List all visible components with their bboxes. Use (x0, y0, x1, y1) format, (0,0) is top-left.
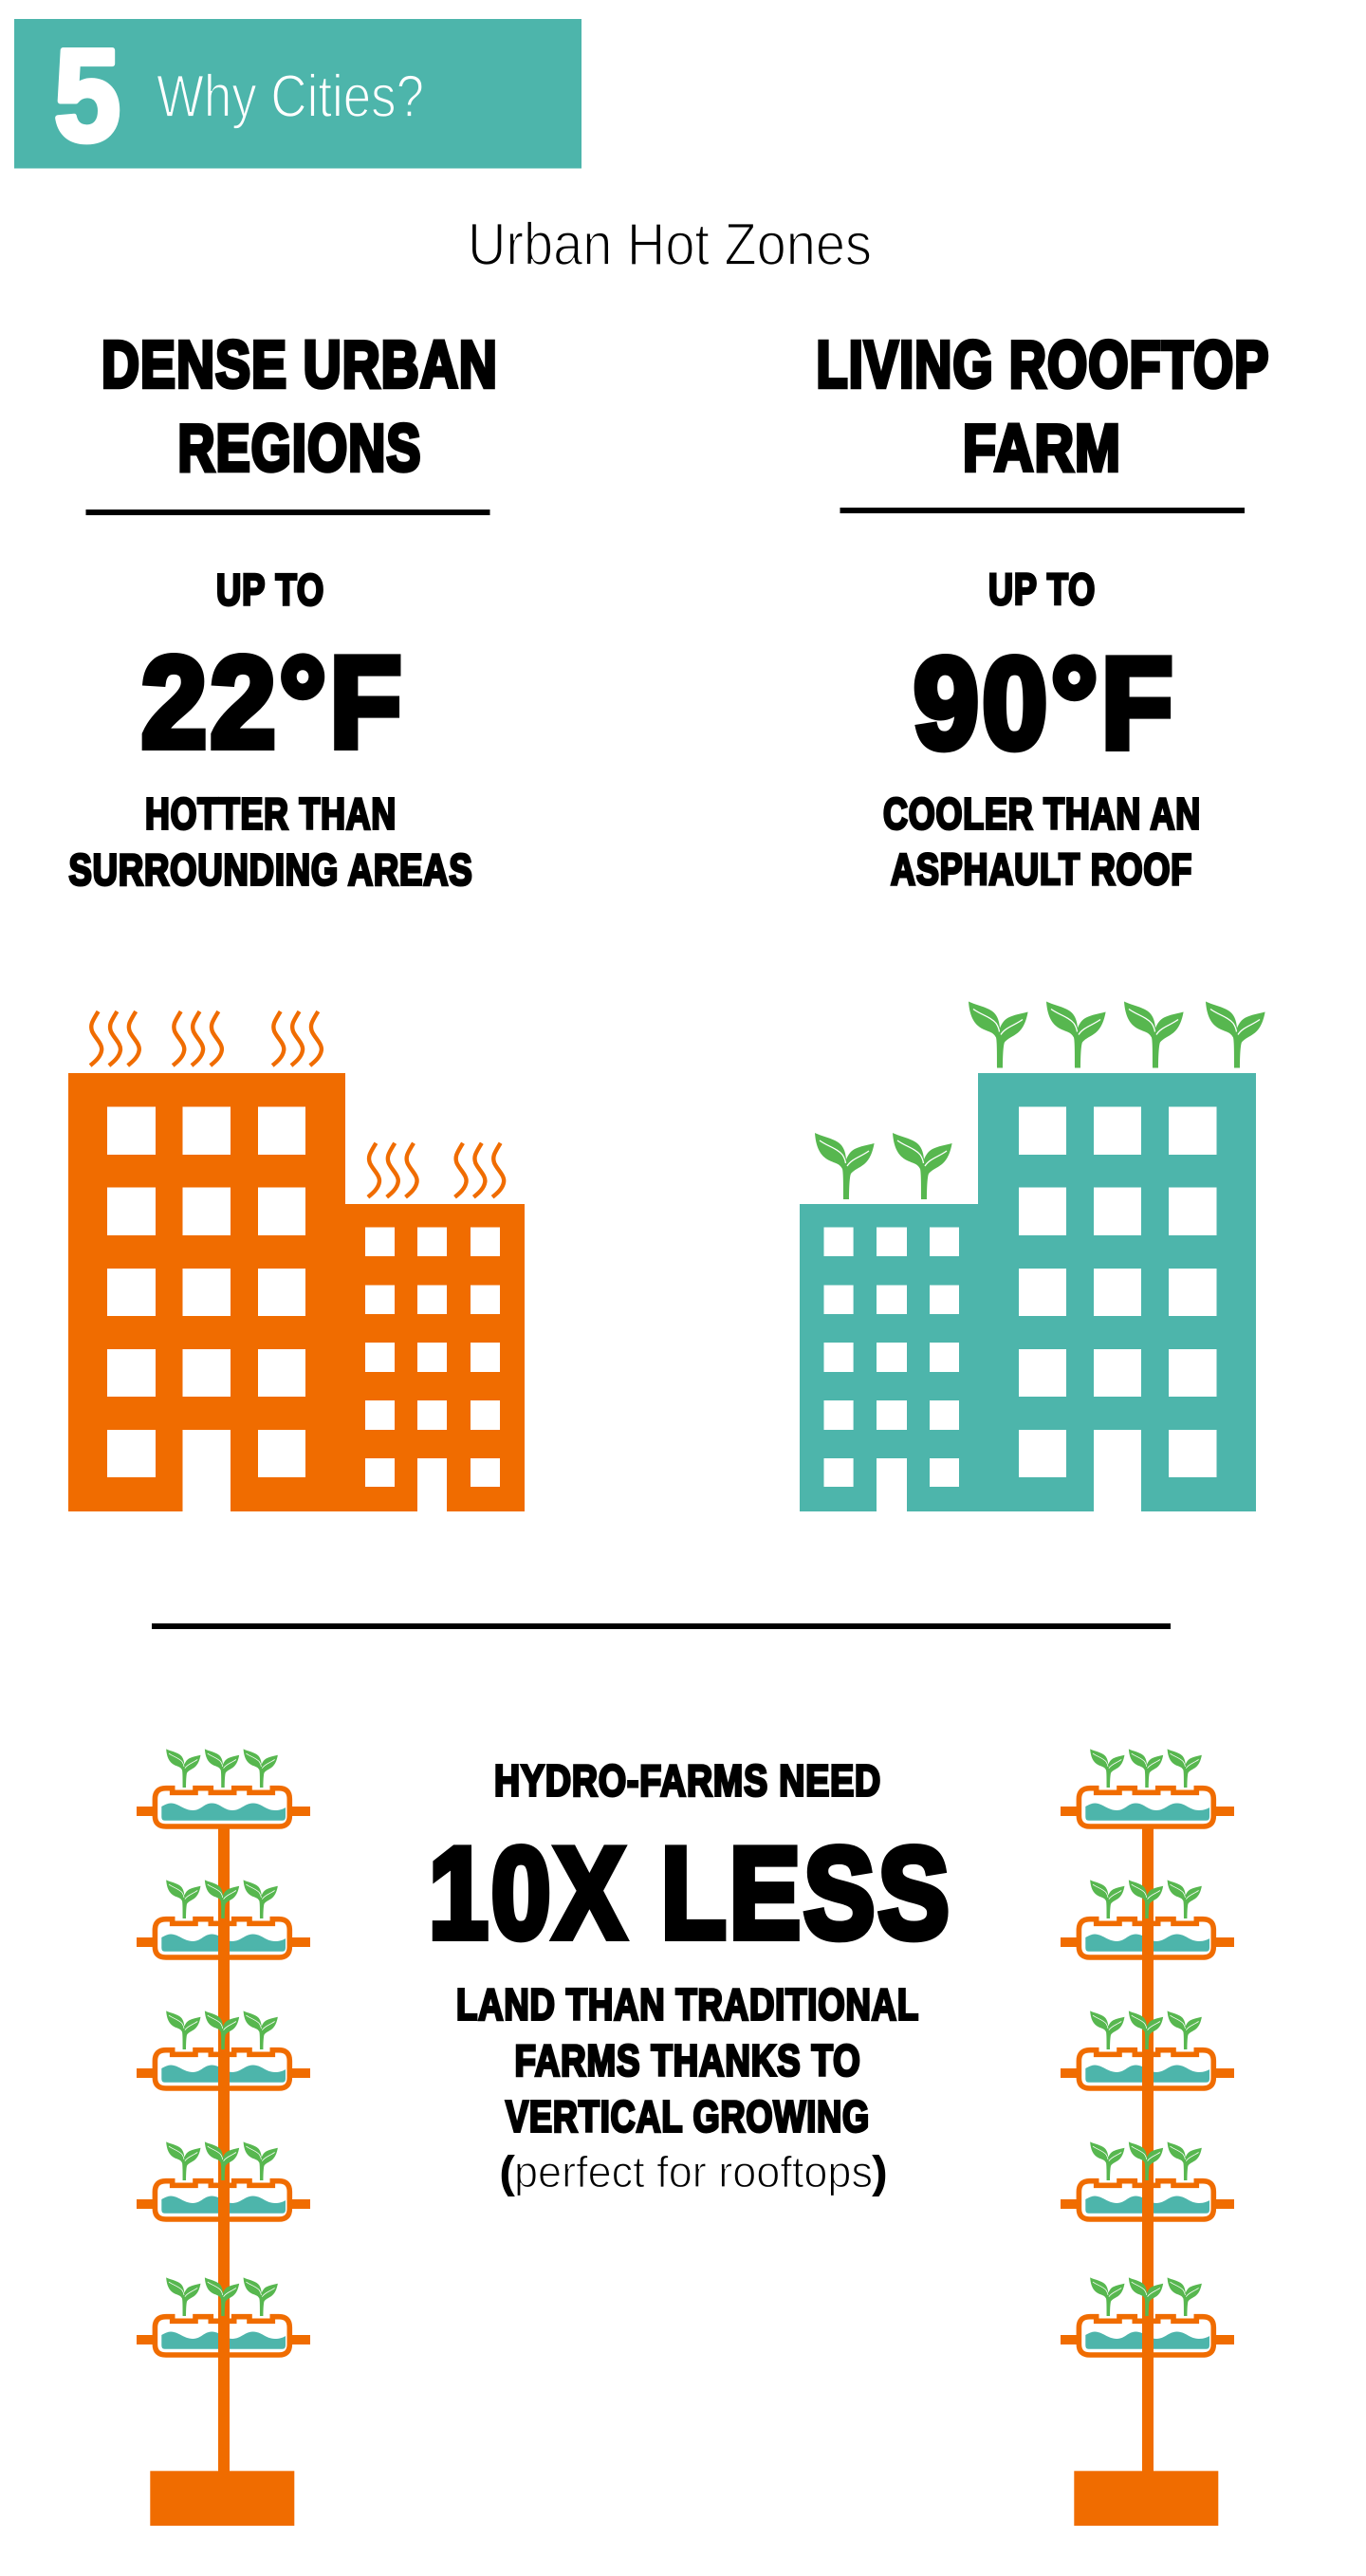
heading: dense urban regions: DENSE URBAN (102, 327, 498, 401)
icon: left hydroponic tower (137, 1749, 310, 2526)
stat: 22°F hotter (68, 565, 472, 894)
stat: 22°F hotter: 22°F (141, 630, 405, 774)
icon: green roof buildings (800, 1002, 1265, 1511)
text block: 10x less land: LAND THAN TRADITIONAL (456, 1979, 919, 2029)
heading: living rooftop farm (816, 327, 1269, 485)
stat: 90°F cooler: ASPHAULT ROOF (891, 844, 1192, 894)
stat: 90°F cooler: 90°F (914, 631, 1176, 775)
icon: rooftop sprouts (815, 1002, 1265, 1199)
heading: dense urban regions: REGIONS (178, 411, 421, 485)
stat: 22°F hotter: HOTTER THAN (145, 789, 397, 839)
text block: 10x less land: 10X LESS (429, 1821, 952, 1965)
text block: 10x less land: VERTICAL GROWING (506, 2091, 870, 2140)
icon: hot orange buildings (68, 1011, 525, 1511)
icon: heat waves (90, 1011, 504, 1197)
text block: 10x less land (429, 1755, 952, 2196)
section number: 5 (54, 23, 120, 169)
section banner (14, 19, 581, 169)
panel: living rooftop farm (800, 327, 1269, 1511)
stat: 90°F cooler: COOLER THAN AN (883, 789, 1201, 839)
section title: Why Cities? (157, 64, 424, 130)
text block: 10x less land: FARMS THANKS TO (514, 2036, 861, 2085)
heading: dense urban regions (102, 327, 498, 485)
text block: 10x less land: HYDRO-FARMS NEED (494, 1755, 881, 1805)
stat: 90°F cooler: UP TO (988, 565, 1096, 614)
icon: right hydroponic tower (1061, 1749, 1234, 2526)
stat: 22°F hotter: UP TO (216, 565, 324, 615)
heading: living rooftop farm: FARM (963, 411, 1121, 485)
text block: 10x less land: (perfect for rooftops) (500, 2147, 887, 2196)
subtitle: Urban Hot Zones (468, 212, 872, 278)
stat: 90°F cooler (883, 565, 1201, 894)
panel: dense urban regions (68, 327, 525, 1511)
stat: 22°F hotter: SURROUNDING AREAS (68, 844, 472, 894)
